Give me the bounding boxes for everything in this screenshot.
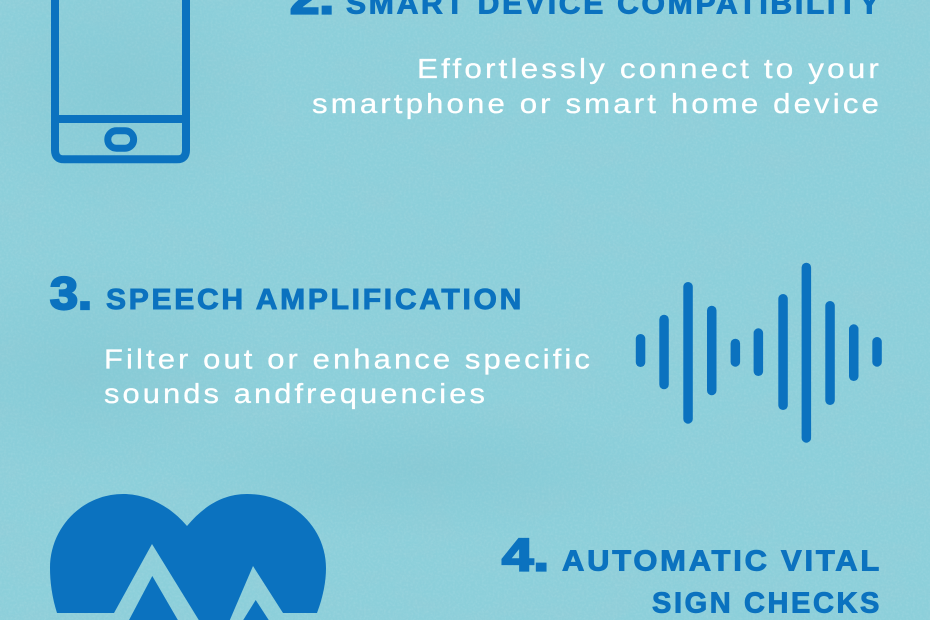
- heading: 4. automatic vital sign checks: AUTOMATIC VITAL: [562, 546, 882, 578]
- text: smart device description: [312, 53, 882, 119]
- text: smart device description: Effortlessly connect to your: [417, 53, 882, 84]
- text: smart device description: smartphone or smart home device: [312, 88, 882, 119]
- icon: sound wave: [636, 263, 882, 443]
- heading: 4. automatic vital sign checks: SIGN CHECKS: [652, 588, 882, 620]
- section 2: smart device compatibility: [290, 0, 882, 119]
- text: speech amplification description: sounds andfrequencies: [104, 378, 488, 409]
- text: speech amplification description: Filter out or enhance specific: [104, 344, 593, 374]
- icon: heart with pulse line: [50, 494, 326, 620]
- section 3: speech amplification: [50, 268, 593, 409]
- heading: 4. automatic vital sign checks: 4.: [502, 530, 549, 581]
- heading: 4. automatic vital sign checks: [502, 530, 882, 620]
- icon: smartphone: [55, 0, 186, 159]
- heading: 3. speech amplification: 3.: [50, 268, 92, 319]
- heading: 3. speech amplification: SPEECH AMPLIFICATION: [106, 284, 524, 316]
- heading: 3. speech amplification: [50, 268, 524, 319]
- text: speech amplification description: [104, 344, 593, 409]
